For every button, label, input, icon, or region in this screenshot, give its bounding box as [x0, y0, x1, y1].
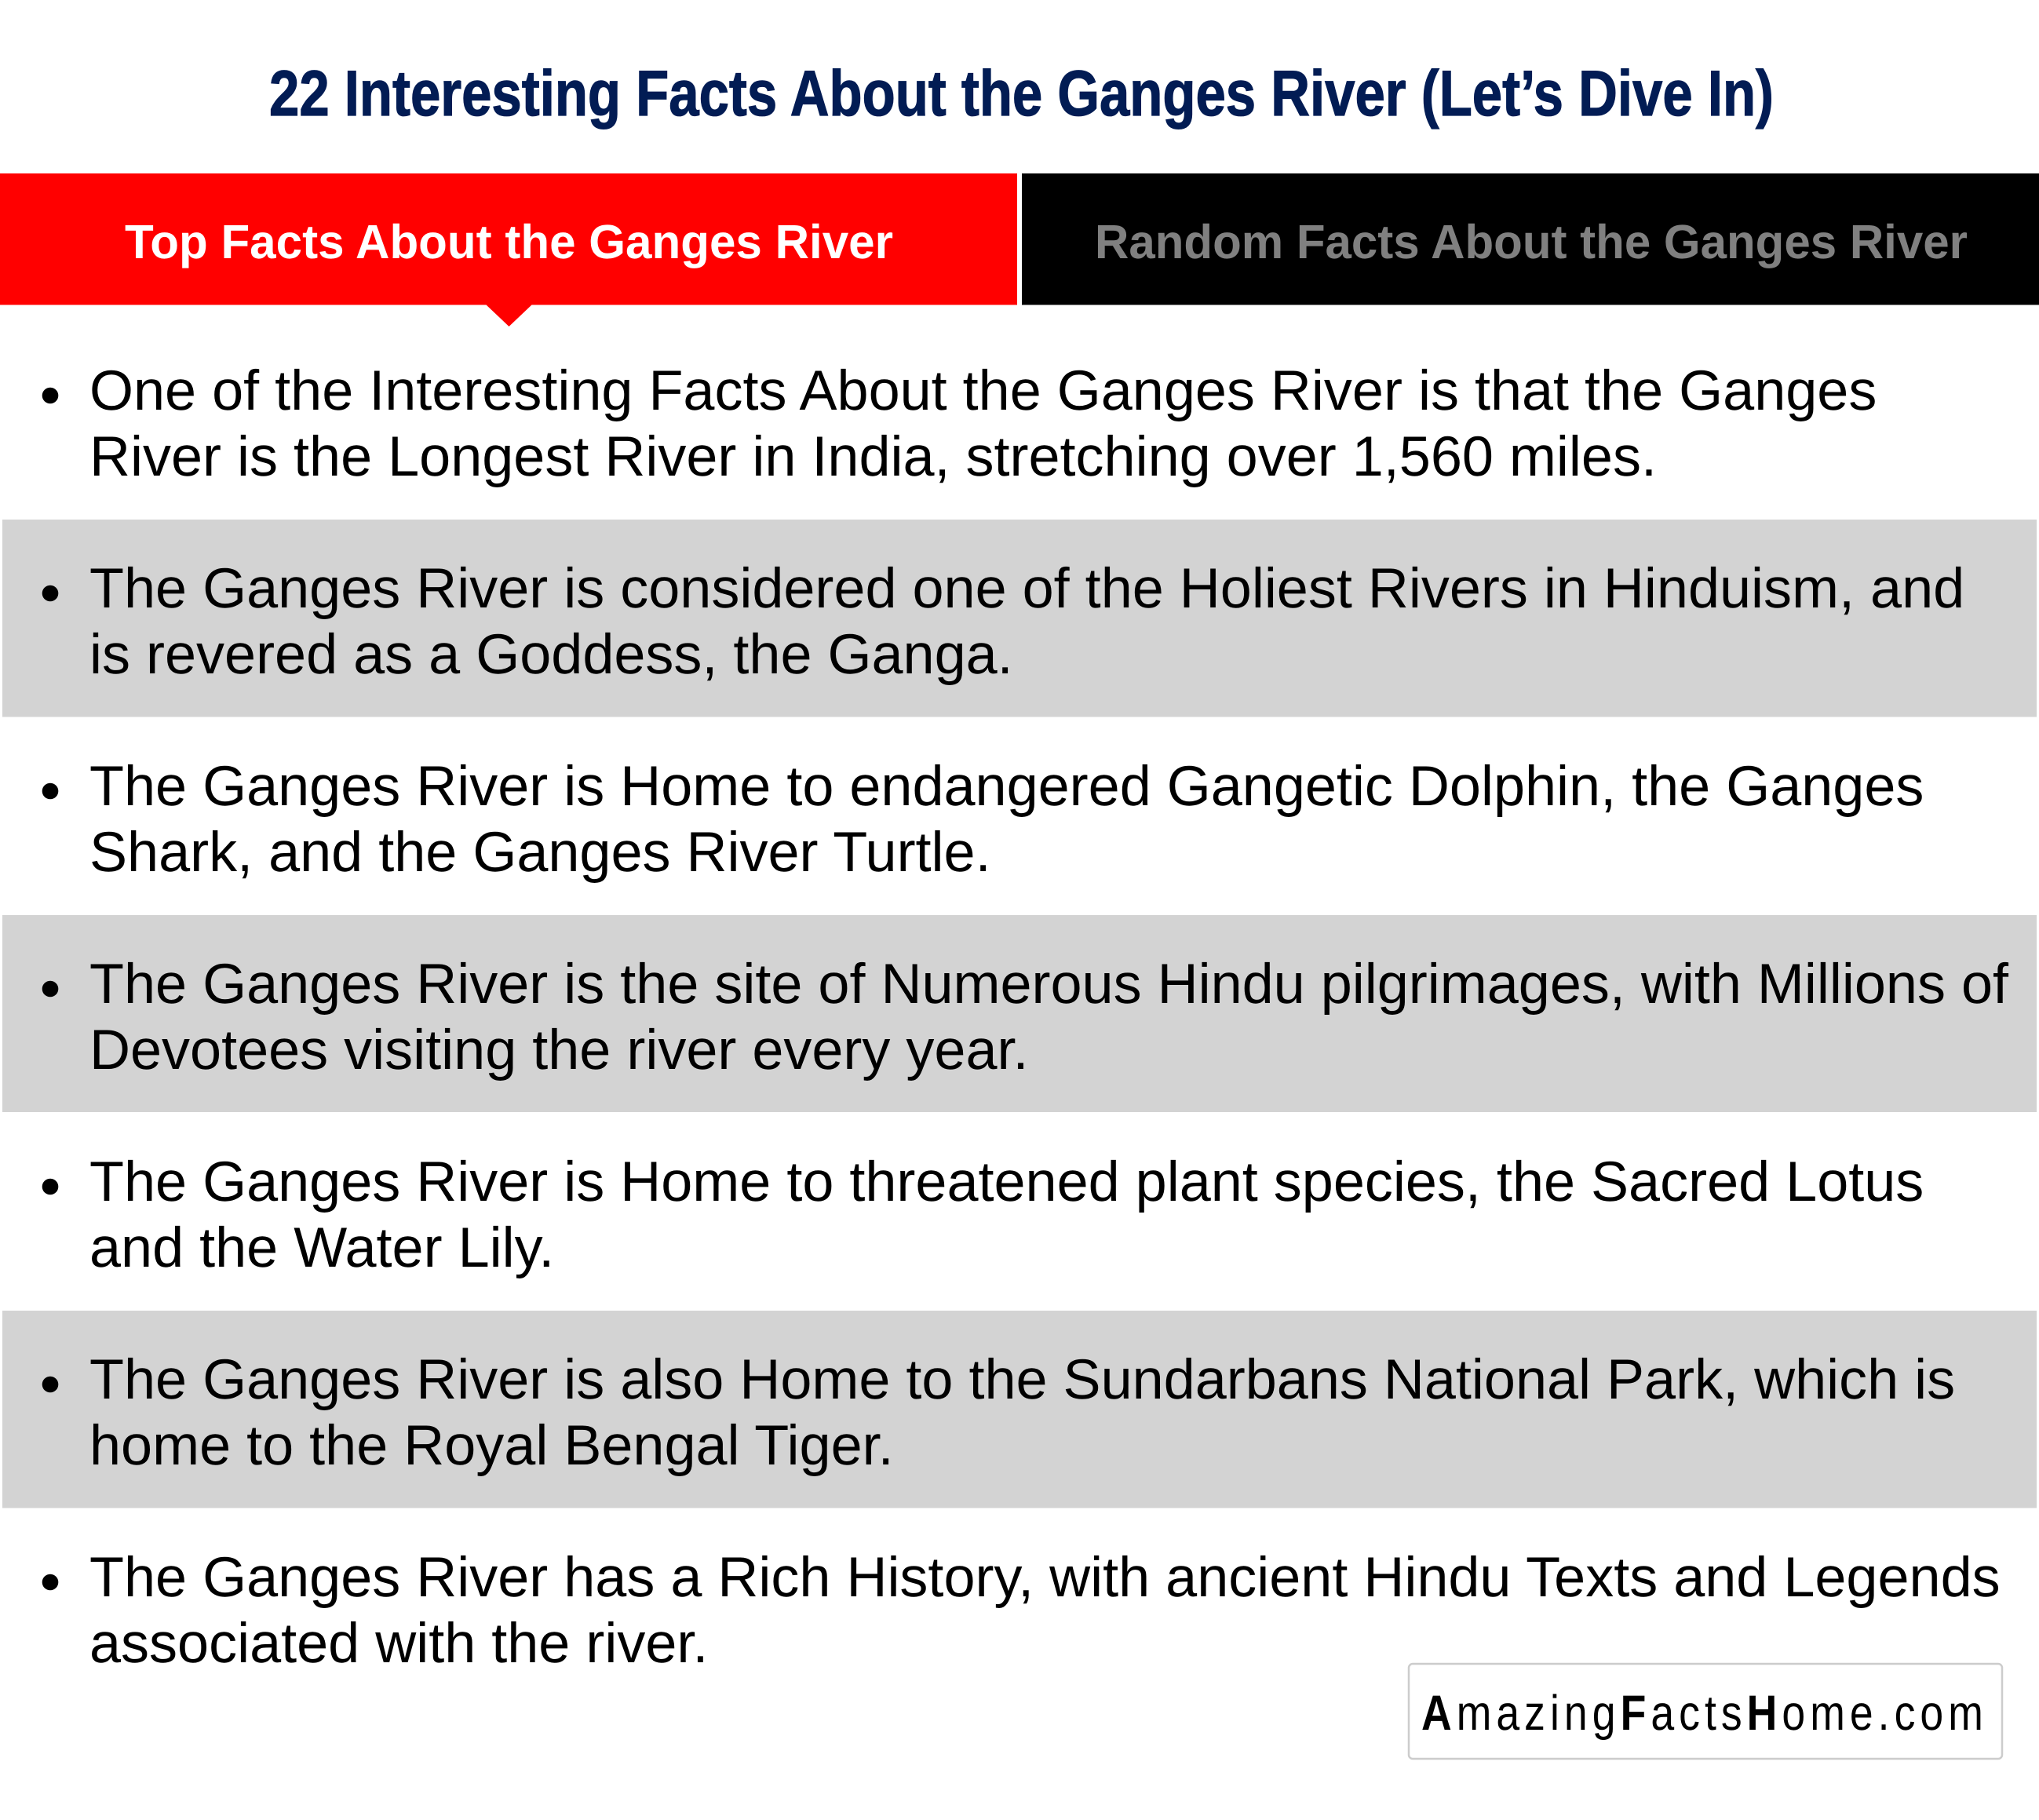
- fact 7: associated with the river.: [89, 1612, 708, 1675]
- fact 2: [2, 520, 2037, 717]
- fact 6: The Ganges River is also Home to the Sundarbans National Park, which is: [89, 1348, 1955, 1411]
- fact 5: and the Water Lily.: [89, 1216, 554, 1279]
- fact 3: The Ganges River is Home to endangered Gangetic Dolphin, the Ganges: [89, 755, 1924, 818]
- fact 6: [2, 1311, 2037, 1508]
- fact 7: [42, 1546, 2001, 1675]
- fact 5: The Ganges River is Home to threatened plant species, the Sacred Lotus: [89, 1151, 1924, 1213]
- fact 1: One of the Interesting Facts About the Ganges River is that the Ganges: [89, 359, 1877, 422]
- tab pointer arrow: [486, 305, 532, 326]
- fact 4: The Ganges River is the site of Numerous Hindu pilgrimages, with Millions of: [89, 953, 2009, 1016]
- fact 1: [42, 359, 1877, 488]
- tab: random facts (inactive): Random Facts About the Ganges River: [1095, 215, 1968, 268]
- tab: random facts (inactive): [1022, 173, 2039, 305]
- fact 7: The Ganges River has a Rich History, with ancient Hindu Texts and Legends: [89, 1546, 2001, 1609]
- tab: top facts (active): Top Facts About the Ganges River: [125, 215, 893, 268]
- fact 4: Devotees visiting the river every year.: [89, 1019, 1029, 1081]
- tab: top facts (active): [0, 173, 1017, 326]
- fact 1: River is the Longest River in India, stretching over 1,560 miles.: [89, 425, 1657, 488]
- title: 22 Interesting Facts About the Ganges River (Let’s Dive In): [269, 58, 1774, 129]
- fact 3: Shark, and the Ganges River Turtle.: [89, 821, 991, 884]
- fact 5: [42, 1151, 1924, 1279]
- fact 6: home to the Royal Bengal Tiger.: [89, 1414, 894, 1477]
- watermark badge: AmazingFactsHome.com: [1421, 1686, 1988, 1741]
- fact 2: The Ganges River is considered one of the Holiest Rivers in Hinduism, and: [89, 557, 1964, 620]
- watermark badge: [1409, 1664, 2002, 1759]
- fact 2: is revered as a Goddess, the Ganga.: [89, 623, 1013, 686]
- fact 3: [42, 755, 1924, 884]
- fact 4: [2, 915, 2037, 1112]
